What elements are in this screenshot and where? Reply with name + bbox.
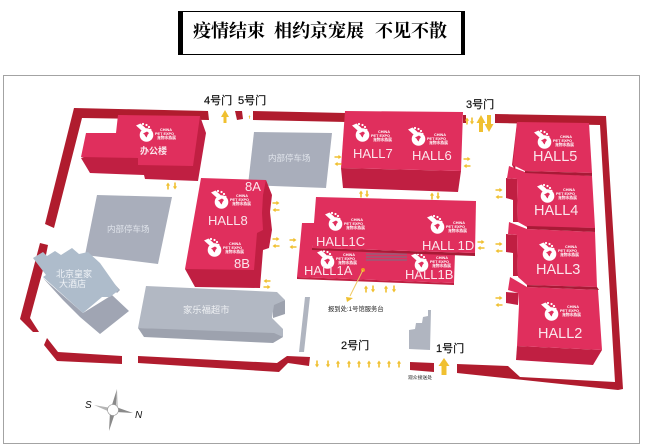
building: hall 5: 宠物水族展 — [555, 142, 574, 147]
title box: 相约京宠展 — [274, 20, 364, 41]
building: hall 8: 宠物水族展 — [232, 201, 251, 206]
compass — [85, 389, 143, 431]
building: supermarket: 家乐福超市 — [183, 304, 230, 315]
building: hall 1C and 1D: CHINA — [351, 218, 363, 222]
building: hall 7 and hall 6 — [341, 111, 463, 192]
building: hall 5 — [512, 122, 592, 176]
building: hall 2: 宠物水族展 — [562, 312, 581, 317]
building: hall 8 — [185, 178, 272, 288]
building: hall 4: CHINA — [563, 188, 575, 192]
building: hall 1C and 1D: HALL1C — [316, 234, 365, 249]
building: hall 4 — [506, 166, 595, 232]
title box: 不见不散 — [375, 20, 447, 41]
parking lot south — [85, 195, 172, 264]
building: hall 2: CHINA — [567, 305, 579, 309]
building: hall 7 and hall 6: HALL6 — [412, 148, 452, 163]
building: hotel: 北京皇家 — [56, 268, 92, 279]
building: office: 办公楼 — [140, 145, 167, 156]
building: hall 3 — [506, 222, 599, 290]
building: hall 3: HALL3 — [536, 262, 580, 278]
building: office: CHINA — [160, 128, 172, 132]
building: hall 7 and hall 6: PET EXPO — [371, 134, 390, 138]
parking lot north: 内部停车场 — [268, 153, 311, 163]
building: hall 8: HALL8 — [208, 213, 248, 228]
building: hotel: 大酒店 — [59, 278, 86, 289]
compass: N — [135, 410, 143, 421]
building: hall 1A and 1B: PET EXPO — [430, 260, 449, 264]
large gate arrows — [221, 110, 494, 375]
perimeter wall — [20, 108, 623, 390]
gate labels: 3号门 — [466, 97, 494, 111]
building: supermarket — [138, 286, 285, 343]
building: hall 3: 宠物水族展 — [560, 252, 579, 257]
title box — [178, 11, 465, 55]
small traffic arrows — [166, 115, 502, 368]
parking lot south: 内部停车场 — [107, 224, 150, 234]
gate labels: 5号门 — [238, 93, 266, 107]
building: hall 1C and 1D: 宠物水族展 — [448, 228, 467, 233]
building: hall 8: PET EXPO — [230, 198, 249, 202]
building: hall 5: HALL5 — [533, 149, 577, 165]
building: hall 1C and 1D: PET EXPO — [446, 225, 465, 229]
gate labels: 1号门 — [436, 341, 464, 355]
building: hall 8: CHINA — [229, 242, 241, 246]
building: hall 8: 8A — [245, 179, 261, 194]
building: hall 8: 宠物水族展 — [225, 249, 244, 254]
building: hall 7 and hall 6: 宠物水族展 — [373, 137, 392, 142]
building: office: 宠物水族展 — [157, 135, 176, 140]
gate labels — [204, 93, 494, 355]
building: hall 5: PET EXPO — [553, 139, 572, 143]
building: hall 8: CHINA — [236, 194, 248, 198]
registration pointer — [346, 268, 365, 302]
building: hall 2: PET EXPO — [560, 309, 579, 313]
building: hall 1C and 1D — [312, 197, 476, 256]
building: hotel — [33, 248, 129, 334]
building: hall 8: PET EXPO — [223, 246, 242, 250]
building: hall 7 and hall 6: CHINA — [378, 130, 390, 134]
building: hall 1C and 1D: HALL 1D — [422, 238, 474, 253]
building: hall 4: HALL4 — [534, 203, 578, 219]
building: hall 1A and 1B: HALL1B — [405, 267, 453, 282]
building: hall 1A and 1B: 宠物水族展 — [432, 263, 451, 268]
building: office — [81, 115, 206, 181]
building: hall 3: CHINA — [565, 245, 577, 249]
building: hall 2: HALL2 — [538, 326, 582, 342]
building: hall 1A and 1B: CHINA — [343, 253, 355, 257]
building: hall 1C and 1D: CHINA — [453, 221, 465, 225]
audience pickup label: 观众接送处 — [408, 374, 432, 381]
gate labels: 2号门 — [341, 338, 369, 352]
building: office: PET EXPO — [155, 132, 174, 136]
gate labels: 4号门 — [204, 93, 232, 107]
building: hall 7 and hall 6: 宠物水族展 — [429, 140, 448, 145]
gray strip — [299, 297, 310, 352]
building: hall 1A and 1B — [297, 223, 455, 285]
building: hall 1A and 1B: 宠物水族展 — [338, 260, 357, 265]
building: hall 7 and hall 6: PET EXPO — [427, 137, 446, 141]
building: hall 2 — [506, 277, 602, 365]
building: hall 1A and 1B: CHINA — [436, 256, 448, 260]
title box: 疫情结束 — [193, 21, 265, 41]
compass: S — [85, 400, 92, 411]
building: hall 4: 宠物水族展 — [558, 195, 577, 200]
building: hall 7 and hall 6: HALL7 — [353, 146, 393, 161]
building: hall 1A and 1B: PET EXPO — [336, 257, 355, 261]
registration label: 报到处:1号馆服务台 — [328, 304, 384, 313]
building: hall 8: 8B — [234, 256, 250, 271]
parking lot north — [248, 132, 332, 188]
building: hall 7 and hall 6: CHINA — [434, 133, 446, 137]
stepped structure — [409, 310, 431, 350]
building: hall 1C and 1D: PET EXPO — [344, 222, 363, 226]
building: hall 3: PET EXPO — [558, 249, 577, 253]
building: hall 5: CHINA — [560, 135, 572, 139]
building: hall 1C and 1D: 宠物水族展 — [346, 225, 365, 230]
service desk stripes — [366, 253, 407, 261]
building: hall 1A and 1B: HALL1A — [304, 263, 353, 278]
building: hall 4: PET EXPO — [556, 192, 575, 196]
